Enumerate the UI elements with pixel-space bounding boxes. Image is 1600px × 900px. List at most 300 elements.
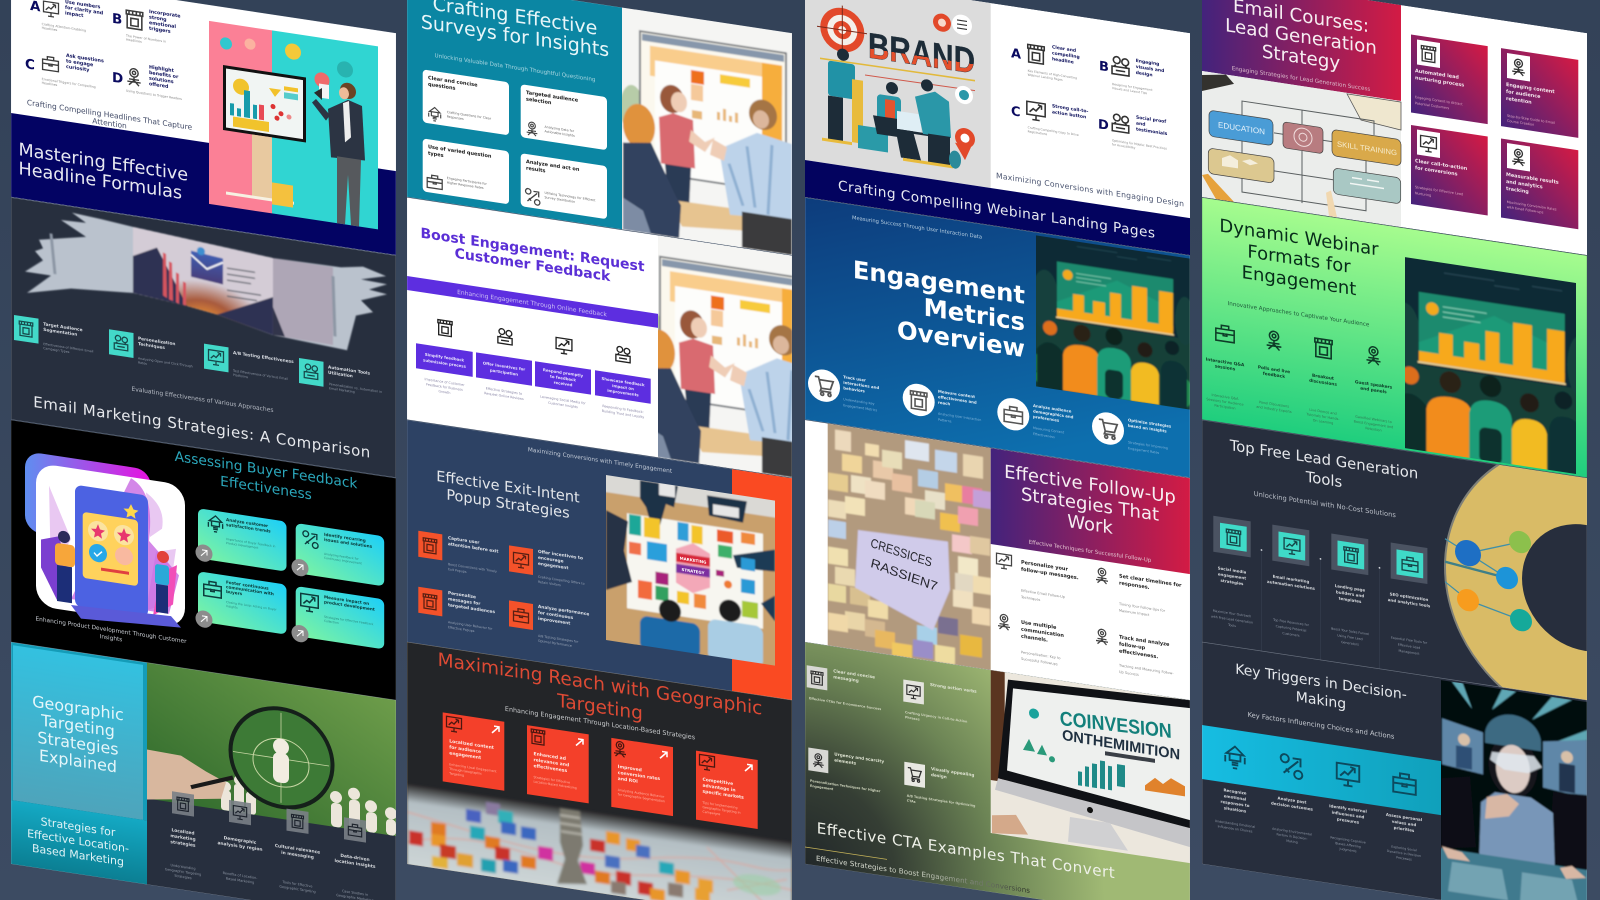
item B bbox=[1099, 52, 1164, 98]
panel: Effective CTA Examples bbox=[805, 642, 1190, 900]
column: demographic: Benefits of Location- bbox=[223, 871, 257, 880]
column: data-driven: Case Studies in bbox=[342, 889, 368, 897]
photo: conversion iMac: ONTHEMIMITION bbox=[1062, 727, 1180, 764]
trigger: past outcomes: Factors in Decision- bbox=[1276, 832, 1308, 841]
item: multiple channels bbox=[998, 614, 1064, 667]
item A: A bbox=[1011, 46, 1022, 63]
title: Popup Strategies bbox=[446, 487, 570, 522]
subtitle: Evaluating Effectiveness of Various Approaches bbox=[131, 386, 274, 414]
format: Q&A: Sessions for Audience bbox=[1206, 397, 1244, 407]
item B: Designing for Engagement: bbox=[1112, 82, 1153, 92]
item: Automation: Utilization bbox=[328, 370, 353, 380]
title: Strategy bbox=[1262, 42, 1340, 74]
item C: to engage bbox=[66, 58, 94, 69]
item: timelines bbox=[1096, 567, 1182, 622]
title band bbox=[991, 448, 1190, 574]
trigger: external influences: Identify external bbox=[1329, 803, 1367, 814]
card: ad relevance: Enhanced ad bbox=[534, 752, 566, 762]
trigger: past outcomes bbox=[1271, 752, 1314, 847]
format: polls bbox=[1256, 329, 1292, 414]
card: engaging content: for audience bbox=[1506, 89, 1541, 100]
format: guest speakers bbox=[1354, 344, 1393, 434]
card: competitive advantage: advantage in bbox=[702, 783, 736, 794]
tool: landing page: Generators bbox=[1341, 640, 1359, 647]
item: track: effectiveness. bbox=[1119, 648, 1158, 660]
card: localized content bbox=[443, 712, 504, 791]
card: localized content: engagement bbox=[449, 750, 482, 761]
title: Engagement bbox=[853, 255, 1025, 310]
item A: impact bbox=[65, 10, 84, 19]
column: simplify: Growth bbox=[439, 389, 450, 395]
item B: design bbox=[1136, 70, 1153, 78]
card: automated lead nurturing bbox=[1411, 35, 1488, 124]
card: continuous communication bbox=[196, 572, 286, 634]
tool: social media: Tools bbox=[1227, 623, 1236, 628]
tool: landing page: Boost Your Sales Funnel bbox=[1331, 627, 1369, 636]
item A: for clarity and bbox=[65, 5, 104, 17]
metric: audience: demographics and bbox=[1033, 408, 1074, 420]
column: simplify: Feedback for Business bbox=[426, 382, 463, 392]
format: breakout: Tutorials for Hands- bbox=[1306, 412, 1340, 421]
watercolor image bbox=[622, 8, 792, 255]
item: Personalization: Analyzing Open and Click-Through bbox=[138, 356, 193, 369]
card: continuous communication: Insights bbox=[226, 604, 238, 610]
item: clear messaging: Effective CTAs for E-commerce Success bbox=[809, 696, 881, 711]
item C bbox=[1011, 97, 1089, 143]
item D: Social proof bbox=[1136, 115, 1166, 125]
item B: triggers bbox=[149, 26, 171, 35]
card: recurring issues: Analyzing Feedback for bbox=[324, 552, 359, 561]
column: localized: strategies bbox=[170, 839, 196, 849]
trigger: personal values: Exploring Social bbox=[1391, 845, 1417, 852]
card: recurring issues: Continuous Improvement bbox=[324, 556, 363, 566]
format: Q&A: sessions bbox=[1215, 363, 1236, 373]
trigger: personal values bbox=[1386, 771, 1423, 863]
column: demographic: Based Marketing bbox=[226, 876, 254, 885]
card: act on results: Utilizing Technology for Efficient bbox=[544, 191, 596, 202]
panel: Engagement Metrics Overview bbox=[805, 184, 1217, 482]
format: Q&A: Participation bbox=[1214, 403, 1236, 411]
tool: social media: engagement bbox=[1218, 571, 1246, 581]
column: cultural: Cultural relevance bbox=[275, 844, 320, 856]
item D: Optimizing for Mobile: Best Practices bbox=[1112, 138, 1167, 151]
column: localized: Localized bbox=[171, 828, 195, 837]
cyan band bbox=[1202, 725, 1441, 815]
metric: optimize: Engagement Rates bbox=[1128, 446, 1159, 455]
card: varied question types: Use of varied question bbox=[428, 144, 491, 160]
item D: D bbox=[112, 70, 123, 87]
card: targeted audience: Targeted audience bbox=[526, 90, 578, 104]
item: timelines: Timing Your Follow-Ups for bbox=[1119, 602, 1165, 613]
column: localized: Understanding bbox=[171, 863, 195, 871]
item: Target Audience: Campaign Types bbox=[43, 346, 70, 354]
item D: D bbox=[1098, 117, 1109, 134]
card: competitive advantage bbox=[696, 751, 758, 829]
title: Formats for bbox=[1247, 241, 1351, 278]
item C: Emotional Triggers for Compelling bbox=[42, 77, 96, 89]
item: Target Audience: Segmentation bbox=[43, 327, 77, 338]
column: respond: to feedback bbox=[550, 374, 576, 383]
item: Automation: Automation Tools bbox=[328, 365, 370, 377]
caption: Maximizing Conversions with Timely Engagement bbox=[528, 447, 673, 475]
tool: email automation: Capturing Potential bbox=[1276, 624, 1306, 633]
metric: optimize bbox=[1092, 410, 1172, 457]
photo: magnifier on pawn bbox=[147, 663, 397, 837]
title: Effective Exit-Intent bbox=[436, 468, 580, 507]
item: multiple channels: Successful Followups bbox=[1021, 657, 1058, 666]
title: Strategies bbox=[37, 728, 119, 759]
subtitle: Innovative Approaches to Captivate Your Audience bbox=[1228, 301, 1370, 329]
item B: strong bbox=[149, 14, 167, 23]
card: localized content: Localized content bbox=[449, 739, 494, 751]
metric: content effectiveness: Patterns bbox=[938, 418, 952, 424]
tool: social media: with Free Lead Generation bbox=[1211, 614, 1253, 625]
item: personalize: Effective Email Follow-Up bbox=[1021, 589, 1065, 599]
card: engaging content: Course Creation bbox=[1507, 119, 1534, 127]
card: product development: product development bbox=[324, 599, 375, 612]
tool: email automation: Customers bbox=[1282, 631, 1300, 638]
title: Surveys for Insights bbox=[421, 10, 609, 62]
item: urgency: Personalization Techniques for Higher bbox=[810, 779, 880, 793]
card: measurable results: with Email Follow-ups bbox=[1507, 205, 1544, 215]
metric: track user: Understanding Key bbox=[843, 397, 874, 406]
item D: and bbox=[1136, 121, 1145, 128]
caption: Enhancing Product Development Through Customer bbox=[36, 616, 186, 645]
subtitle band bbox=[407, 276, 658, 328]
watercolor image bbox=[658, 236, 792, 478]
item A: Use numbers bbox=[65, 0, 100, 10]
card: conversion rates: Improved bbox=[618, 765, 642, 773]
tool: email automation: automation solutions bbox=[1267, 579, 1316, 591]
caption: Insights bbox=[100, 634, 122, 644]
metric: content effectiveness: Analyzing User Interaction bbox=[938, 412, 981, 422]
item: visual design bbox=[904, 762, 976, 813]
item: track: Tracking and Measuring Follow- bbox=[1119, 663, 1174, 676]
item: analyze performance: Optimal Performance bbox=[538, 639, 572, 648]
card: product development: Collection bbox=[324, 619, 339, 625]
title: Work bbox=[1067, 511, 1113, 539]
card: competitive advantage: Geographic Targeting in bbox=[702, 805, 741, 815]
title: Metrics bbox=[924, 293, 1025, 337]
item: action verbs: Strong action verbs bbox=[930, 682, 977, 694]
card: automated lead nurturing: nurturing process bbox=[1415, 75, 1464, 89]
title: Dynamic Webinar bbox=[1219, 216, 1379, 260]
card: clear questions: Responses bbox=[447, 115, 464, 121]
item A: Key Elements of High-Converting bbox=[1028, 69, 1077, 80]
left heading block bbox=[11, 642, 147, 885]
title: Boost Engagement: Request bbox=[420, 226, 645, 275]
item D: for Accessibility bbox=[1112, 142, 1136, 150]
trigger: emotional: responses to bbox=[1220, 799, 1250, 808]
card: ad relevance: effectiveness bbox=[534, 763, 567, 774]
item: personalize: Analyzing User Behavior for bbox=[448, 620, 492, 631]
metric: content effectiveness: Measure content bbox=[938, 389, 975, 399]
card: continuous communication: communication with bbox=[226, 584, 274, 596]
card: product development bbox=[292, 586, 384, 648]
photo: sticky notes wall bbox=[828, 424, 991, 670]
card: satisfaction trends bbox=[196, 508, 286, 574]
item C: Strong call-to- bbox=[1052, 104, 1088, 115]
column: incentives bbox=[476, 325, 532, 402]
item A: Webinar Landing Pages bbox=[1028, 73, 1063, 82]
format: guest speakers: Guest speakers bbox=[1355, 380, 1392, 391]
subtitle: Crafting Compelling Headlines That Capture bbox=[27, 98, 192, 132]
column: respond: Customer Insights bbox=[548, 401, 578, 409]
item: capture attention bbox=[418, 531, 498, 579]
card: call to action: Nurturing bbox=[1415, 191, 1431, 198]
format: guest speakers: Retention bbox=[1365, 426, 1382, 433]
trigger: external influences: Judgments bbox=[1339, 847, 1357, 853]
item C: curiosity bbox=[66, 64, 90, 74]
trigger: emotional: Recognize bbox=[1223, 787, 1247, 796]
title: Lead Generation bbox=[1225, 15, 1377, 59]
column: showcase: Building Trust and Loyalty bbox=[602, 409, 644, 419]
item C: Headlines bbox=[42, 81, 58, 87]
metric: track user: Engagement Metrics bbox=[843, 403, 877, 412]
item: Automation: Email Marketing bbox=[329, 386, 355, 394]
metric: optimize: Strategies for Improving bbox=[1128, 440, 1168, 450]
tool: SEO: Effective Lead bbox=[1398, 643, 1420, 650]
card: targeted audience: Analyzing Data for bbox=[544, 125, 574, 133]
item B: visuals and bbox=[1136, 64, 1164, 74]
metric: track user: interactions and bbox=[843, 380, 879, 390]
column: incentives: Request Online Reviews bbox=[484, 391, 524, 401]
title: Targeting bbox=[556, 691, 643, 725]
subtitle: Enhancing Engagement Through Location-Based Strategies bbox=[505, 705, 696, 742]
trigger: past outcomes: Analyze past bbox=[1278, 795, 1306, 805]
item: offer incentives bbox=[509, 544, 585, 591]
item: clear messaging bbox=[807, 664, 881, 711]
tool: email automation bbox=[1267, 524, 1316, 640]
item: personalize: Techniques bbox=[1020, 595, 1041, 602]
item: urgency bbox=[808, 747, 884, 799]
illustration: presenter with megaphone bbox=[209, 21, 378, 229]
photo: marketing strategy table: STRATEGY bbox=[682, 567, 705, 575]
item: personalize: follow-up messages. bbox=[1021, 567, 1079, 581]
item: personalize bbox=[418, 586, 495, 636]
title: Assessing Buyer Feedback bbox=[175, 449, 357, 492]
card: act on results: Survey Distribution bbox=[544, 195, 575, 204]
tool: SEO: Management bbox=[1399, 649, 1420, 656]
item: Personalization: Techniques bbox=[138, 341, 165, 351]
item B: B bbox=[1099, 59, 1109, 75]
title: Effective CTA Examples That Convert bbox=[817, 819, 1115, 882]
column: respond: Respond promptly bbox=[543, 367, 583, 378]
card: continuous communication: Foster continuous bbox=[226, 579, 269, 591]
subtitle: Effective Location- bbox=[27, 827, 129, 855]
item: analyze performance bbox=[509, 599, 589, 651]
tool: landing page: templates bbox=[1339, 596, 1362, 604]
illustration: BRAND team bbox=[817, 0, 975, 172]
card: competitive advantage: Competitive bbox=[702, 778, 733, 787]
format: guest speakers: Gamified Webinars to bbox=[1355, 415, 1392, 424]
column: simplify: Importance of Customer bbox=[425, 377, 464, 387]
item A: headline bbox=[1052, 56, 1074, 66]
item: action verbs: Phrases bbox=[905, 715, 920, 722]
card: conversion rates: for Geographic Segmentation bbox=[618, 792, 665, 803]
item: urgency: Engagement bbox=[810, 784, 834, 791]
trigger: personal values: priorities bbox=[1394, 825, 1415, 833]
card: recurring issues: Identify recurring bbox=[324, 532, 366, 543]
card: call to action: Strategies for Effective Lead bbox=[1415, 185, 1463, 196]
item: multiple channels: communication bbox=[1021, 627, 1064, 639]
item B: B bbox=[112, 11, 122, 28]
column: respond bbox=[535, 334, 591, 411]
metric: track user: behaviors bbox=[843, 385, 866, 394]
trigger: external influences: pressures bbox=[1337, 816, 1360, 825]
trigger: external influences bbox=[1329, 762, 1367, 855]
item A: compelling bbox=[1052, 50, 1080, 60]
tool: SEO: SEO optimization bbox=[1390, 591, 1428, 602]
title: Tools bbox=[1305, 468, 1342, 491]
item: clear messaging: Clear and concise bbox=[833, 668, 875, 680]
column: data-driven: location insights bbox=[334, 858, 376, 870]
photo: marketing strategy table bbox=[606, 475, 775, 666]
item D: Using Questions to Trigger Readers bbox=[126, 89, 182, 101]
format: guest speakers: Boost Engagement and bbox=[1354, 419, 1393, 429]
subtitle: Unlocking Potential with No-Cost Solutions bbox=[1254, 490, 1396, 519]
trigger: emotional bbox=[1215, 744, 1255, 834]
item: timelines: Maximum Impact bbox=[1119, 609, 1150, 617]
column: localized bbox=[165, 790, 201, 882]
card: engaging content bbox=[1501, 48, 1578, 138]
trigger: personal values: Dynamics in Decision bbox=[1387, 849, 1421, 858]
column: simplify: Simplify feedback bbox=[425, 352, 464, 363]
subtitle band: Enhancing Engagement Through Online Feedback bbox=[457, 289, 607, 319]
trigger: past outcomes: Making bbox=[1286, 839, 1298, 844]
column: localized: Strategies bbox=[174, 874, 192, 880]
card: localized content: Targeting bbox=[448, 771, 464, 778]
metric: optimize: based on insights bbox=[1128, 423, 1167, 434]
tool: SEO: Essential Free Tools for bbox=[1391, 636, 1427, 645]
metric: content effectiveness: effectiveness and bbox=[938, 394, 977, 405]
trigger: external influences: influences and bbox=[1332, 810, 1365, 820]
column: cultural: Tools for Effective bbox=[283, 880, 312, 889]
column: demographic bbox=[217, 798, 263, 886]
trigger: past outcomes: decision outcomes bbox=[1271, 800, 1314, 812]
separators bbox=[1262, 550, 1380, 669]
column: cultural: in messaging bbox=[281, 850, 314, 861]
tool: SEO: and analytics tools bbox=[1388, 597, 1431, 609]
item: analyze performance: A/B Testing Strategies for bbox=[538, 634, 578, 644]
item A bbox=[30, 0, 103, 32]
trigger: personal values: Assess personal bbox=[1386, 812, 1422, 822]
trigger: external influences: Biases Affecting bbox=[1335, 841, 1361, 849]
panel: Mastering Effective Headline Formulas bbox=[11, 0, 396, 255]
metric: track user: Track user bbox=[843, 374, 866, 383]
card: localized content: Through Geographic bbox=[448, 767, 482, 776]
format: Q&A: Interactive Q&A bbox=[1206, 358, 1244, 368]
card: product development: Measure impact on bbox=[324, 594, 369, 606]
item: personalize: Personalize bbox=[448, 591, 476, 600]
panel: Assessing Buyer Feedback bbox=[11, 420, 396, 700]
item D: Highlight bbox=[149, 65, 174, 74]
card: targeted audience: selection bbox=[526, 96, 552, 106]
item: capture attention: Boost Conversions with Timely bbox=[448, 562, 497, 574]
item: offer incentives: engagement bbox=[538, 561, 568, 571]
card: ad relevance: relevance and bbox=[534, 757, 569, 768]
item: Automation bbox=[299, 358, 382, 394]
tool: landing page: Using Free Lead bbox=[1337, 633, 1363, 641]
subtitle: Key Factors Influencing Choices and Actions bbox=[1248, 711, 1395, 741]
format: polls: Polls and live bbox=[1258, 365, 1290, 375]
item: urgency: elements bbox=[834, 757, 857, 766]
photo: map with pins bbox=[407, 784, 792, 900]
item: A/B Testing bbox=[204, 344, 294, 380]
panel: Geographic Targeting bbox=[11, 642, 397, 900]
metric: content effectiveness: reach bbox=[938, 400, 950, 406]
item: A/B Testing: A/B Testing Effectiveness bbox=[233, 350, 294, 365]
card: varied question types: types bbox=[428, 151, 444, 159]
title: Customer Feedback bbox=[455, 246, 611, 285]
illustration: phone with ratings bbox=[25, 451, 185, 634]
panel: Dynamic Webinar Formats bbox=[1202, 198, 1600, 498]
format: Q&A bbox=[1206, 323, 1245, 412]
item B bbox=[113, 9, 180, 43]
column: localized: Geographic Targeting bbox=[165, 867, 201, 877]
card: localized content: Enhancing Local Engagement bbox=[449, 762, 497, 774]
column: showcase: impact on bbox=[612, 383, 634, 391]
tool: social media: Maximize Your Outreach bbox=[1213, 609, 1251, 618]
title: Crafting Compelling Webinar Landing Pages bbox=[838, 178, 1155, 242]
trigger: emotional: Influences on Choices bbox=[1218, 824, 1253, 834]
item C: C bbox=[1011, 104, 1021, 121]
metric: content effectiveness bbox=[903, 382, 981, 428]
panel: Key Triggers in Decision-Making bbox=[1202, 637, 1597, 900]
item: A/B Testing: Platforms bbox=[233, 373, 248, 379]
card: competitive advantage: Tips for Implementing bbox=[702, 801, 737, 810]
subtitle: Engaging Strategies for Lead Generation Success bbox=[1232, 66, 1370, 93]
title: Mastering Effective bbox=[18, 140, 188, 186]
column: cultural bbox=[275, 807, 320, 895]
column: respond: Leveraging Social Media for bbox=[540, 395, 586, 405]
brush image: email and chart bbox=[25, 206, 387, 356]
panel: Exit-Intent Popup bbox=[407, 420, 792, 700]
photo: sticky notes wall: RASSIEN7 bbox=[869, 556, 939, 594]
card: conversion rates: conversion rates bbox=[618, 770, 660, 782]
subtitle: Maximizing Conversions with Engaging Design bbox=[996, 171, 1184, 209]
title: Targeting bbox=[40, 711, 115, 741]
card: recurring issues bbox=[292, 522, 384, 589]
item: visual design: Visually appealing bbox=[931, 766, 974, 778]
card: engaging content: Step-by-Step Guide to Email bbox=[1507, 114, 1555, 125]
metric: audience: Analyze audience bbox=[1033, 403, 1071, 414]
item B: Engaging bbox=[1136, 59, 1159, 67]
item: action verbs bbox=[903, 678, 977, 730]
metric: audience: Effectiveness bbox=[1033, 432, 1055, 439]
panel: Email Courses bbox=[1202, 0, 1587, 255]
item: offer incentives: Crafting Compelling Offers to bbox=[538, 575, 585, 586]
card: satisfaction trends: Analyze customer bbox=[226, 517, 268, 528]
card: varied question types bbox=[423, 138, 509, 204]
card: call to action: Clear call-to-action bbox=[1415, 158, 1467, 172]
item: personalize: Personalize your bbox=[1021, 560, 1068, 573]
format: guest speakers: and panels bbox=[1360, 385, 1387, 395]
title band bbox=[1202, 0, 1401, 101]
panel: Top Free Lead Generation Tools bbox=[1202, 390, 1600, 749]
item A: Headlines bbox=[42, 26, 58, 32]
panel: Boost Engagement bbox=[407, 188, 832, 492]
column: demographic: analysis by region bbox=[217, 840, 263, 853]
card: conversion rates: and ROI bbox=[618, 776, 638, 785]
column: data-driven: Data-driven bbox=[340, 854, 370, 863]
card: act on results: Analyze and act on bbox=[526, 159, 579, 173]
item: track: Up Success bbox=[1119, 670, 1139, 677]
title: Effectiveness bbox=[220, 474, 312, 503]
title: Overview bbox=[897, 315, 1025, 363]
panel: Crafting Compelling Webinar Landing Pages bbox=[805, 0, 1190, 255]
item: analyze performance: for continuous bbox=[538, 610, 574, 621]
